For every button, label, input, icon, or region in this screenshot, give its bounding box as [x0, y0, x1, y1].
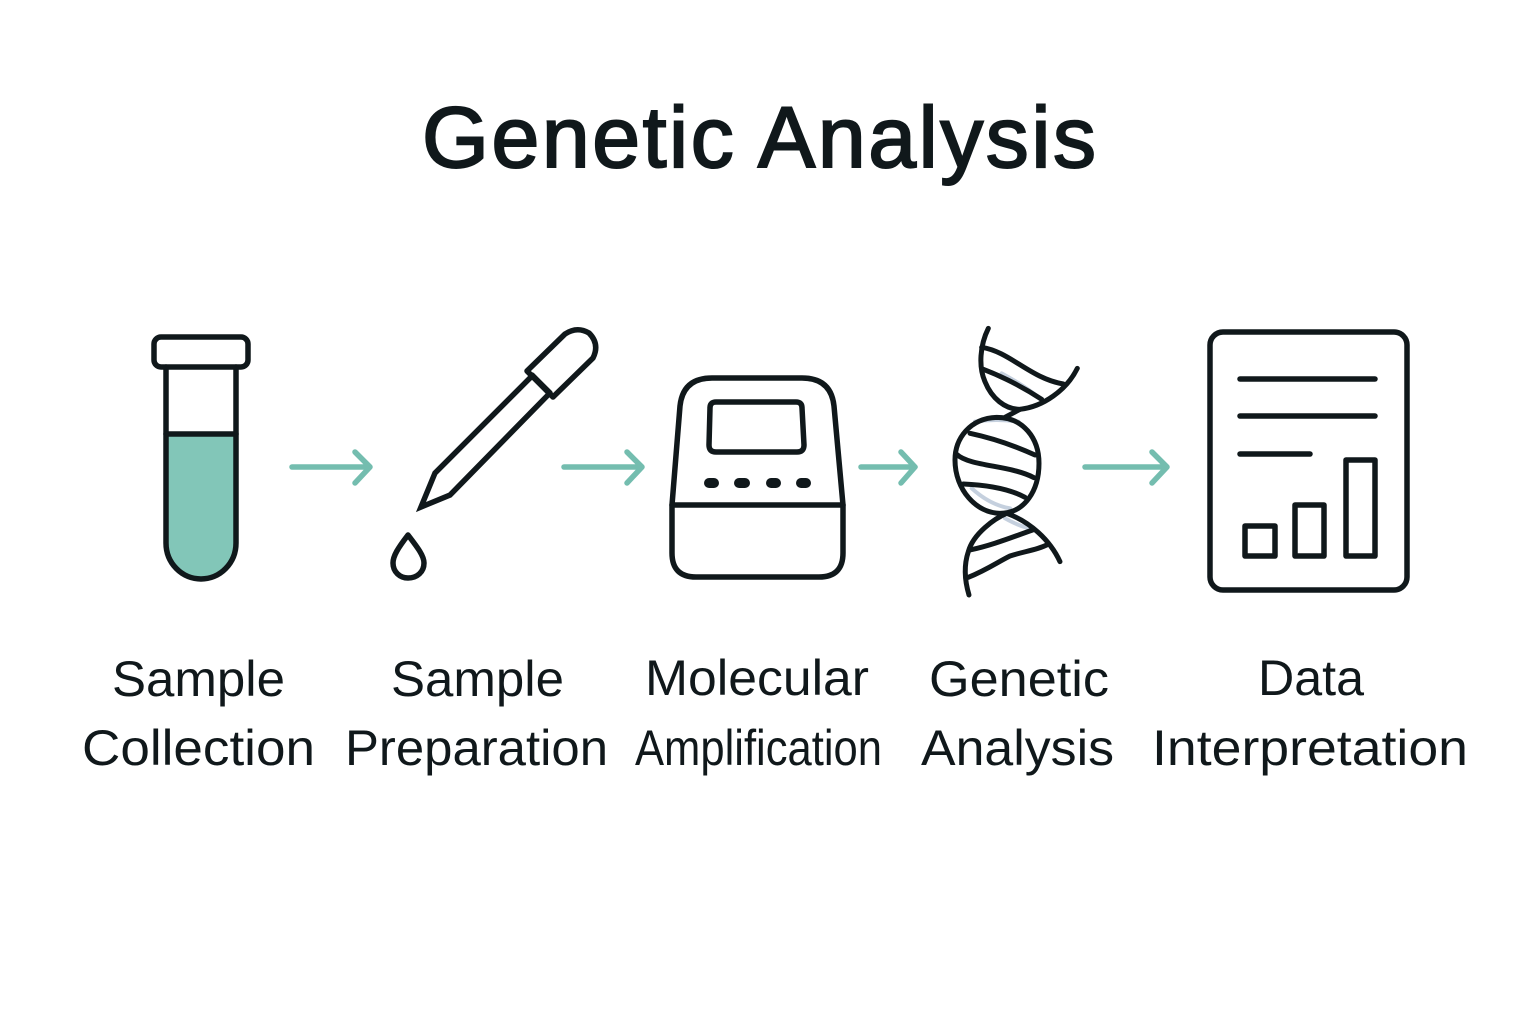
label: Sample Preparation: Preparation [345, 720, 608, 776]
label: Sample Collection: Collection [82, 720, 315, 776]
icon: dropper [393, 330, 596, 578]
label: Genetic Analysis [921, 651, 1114, 776]
title: Genetic Analysis [422, 90, 1096, 186]
label: Data Interpretation: Data [1258, 650, 1364, 706]
label: Sample Collection [82, 651, 315, 776]
label: Genetic Analysis: Genetic [929, 651, 1109, 707]
label: Molecular Amplification: Molecular [645, 650, 869, 706]
label: Data Interpretation [1152, 650, 1468, 776]
icon: test tube [154, 337, 248, 579]
label: Sample Collection: Sample [112, 651, 285, 707]
label: Genetic Analysis: Analysis [921, 720, 1114, 776]
label: Data Interpretation: Interpretation [1152, 720, 1468, 776]
arrow: genetic analysis to interpretation [1085, 452, 1167, 483]
icon: thermal cycler [672, 378, 843, 577]
label: Sample Preparation [345, 651, 608, 776]
arrow: amplification to genetic analysis [861, 452, 915, 483]
icon: DNA helix [955, 328, 1077, 595]
icon: report document [1210, 332, 1407, 590]
label: Molecular Amplification [635, 650, 882, 776]
label: Molecular Amplification: Amplification [635, 720, 882, 776]
arrow: preparation to amplification [564, 452, 642, 483]
arrow: collection to preparation [292, 452, 370, 483]
label: Sample Preparation: Sample [391, 651, 564, 707]
